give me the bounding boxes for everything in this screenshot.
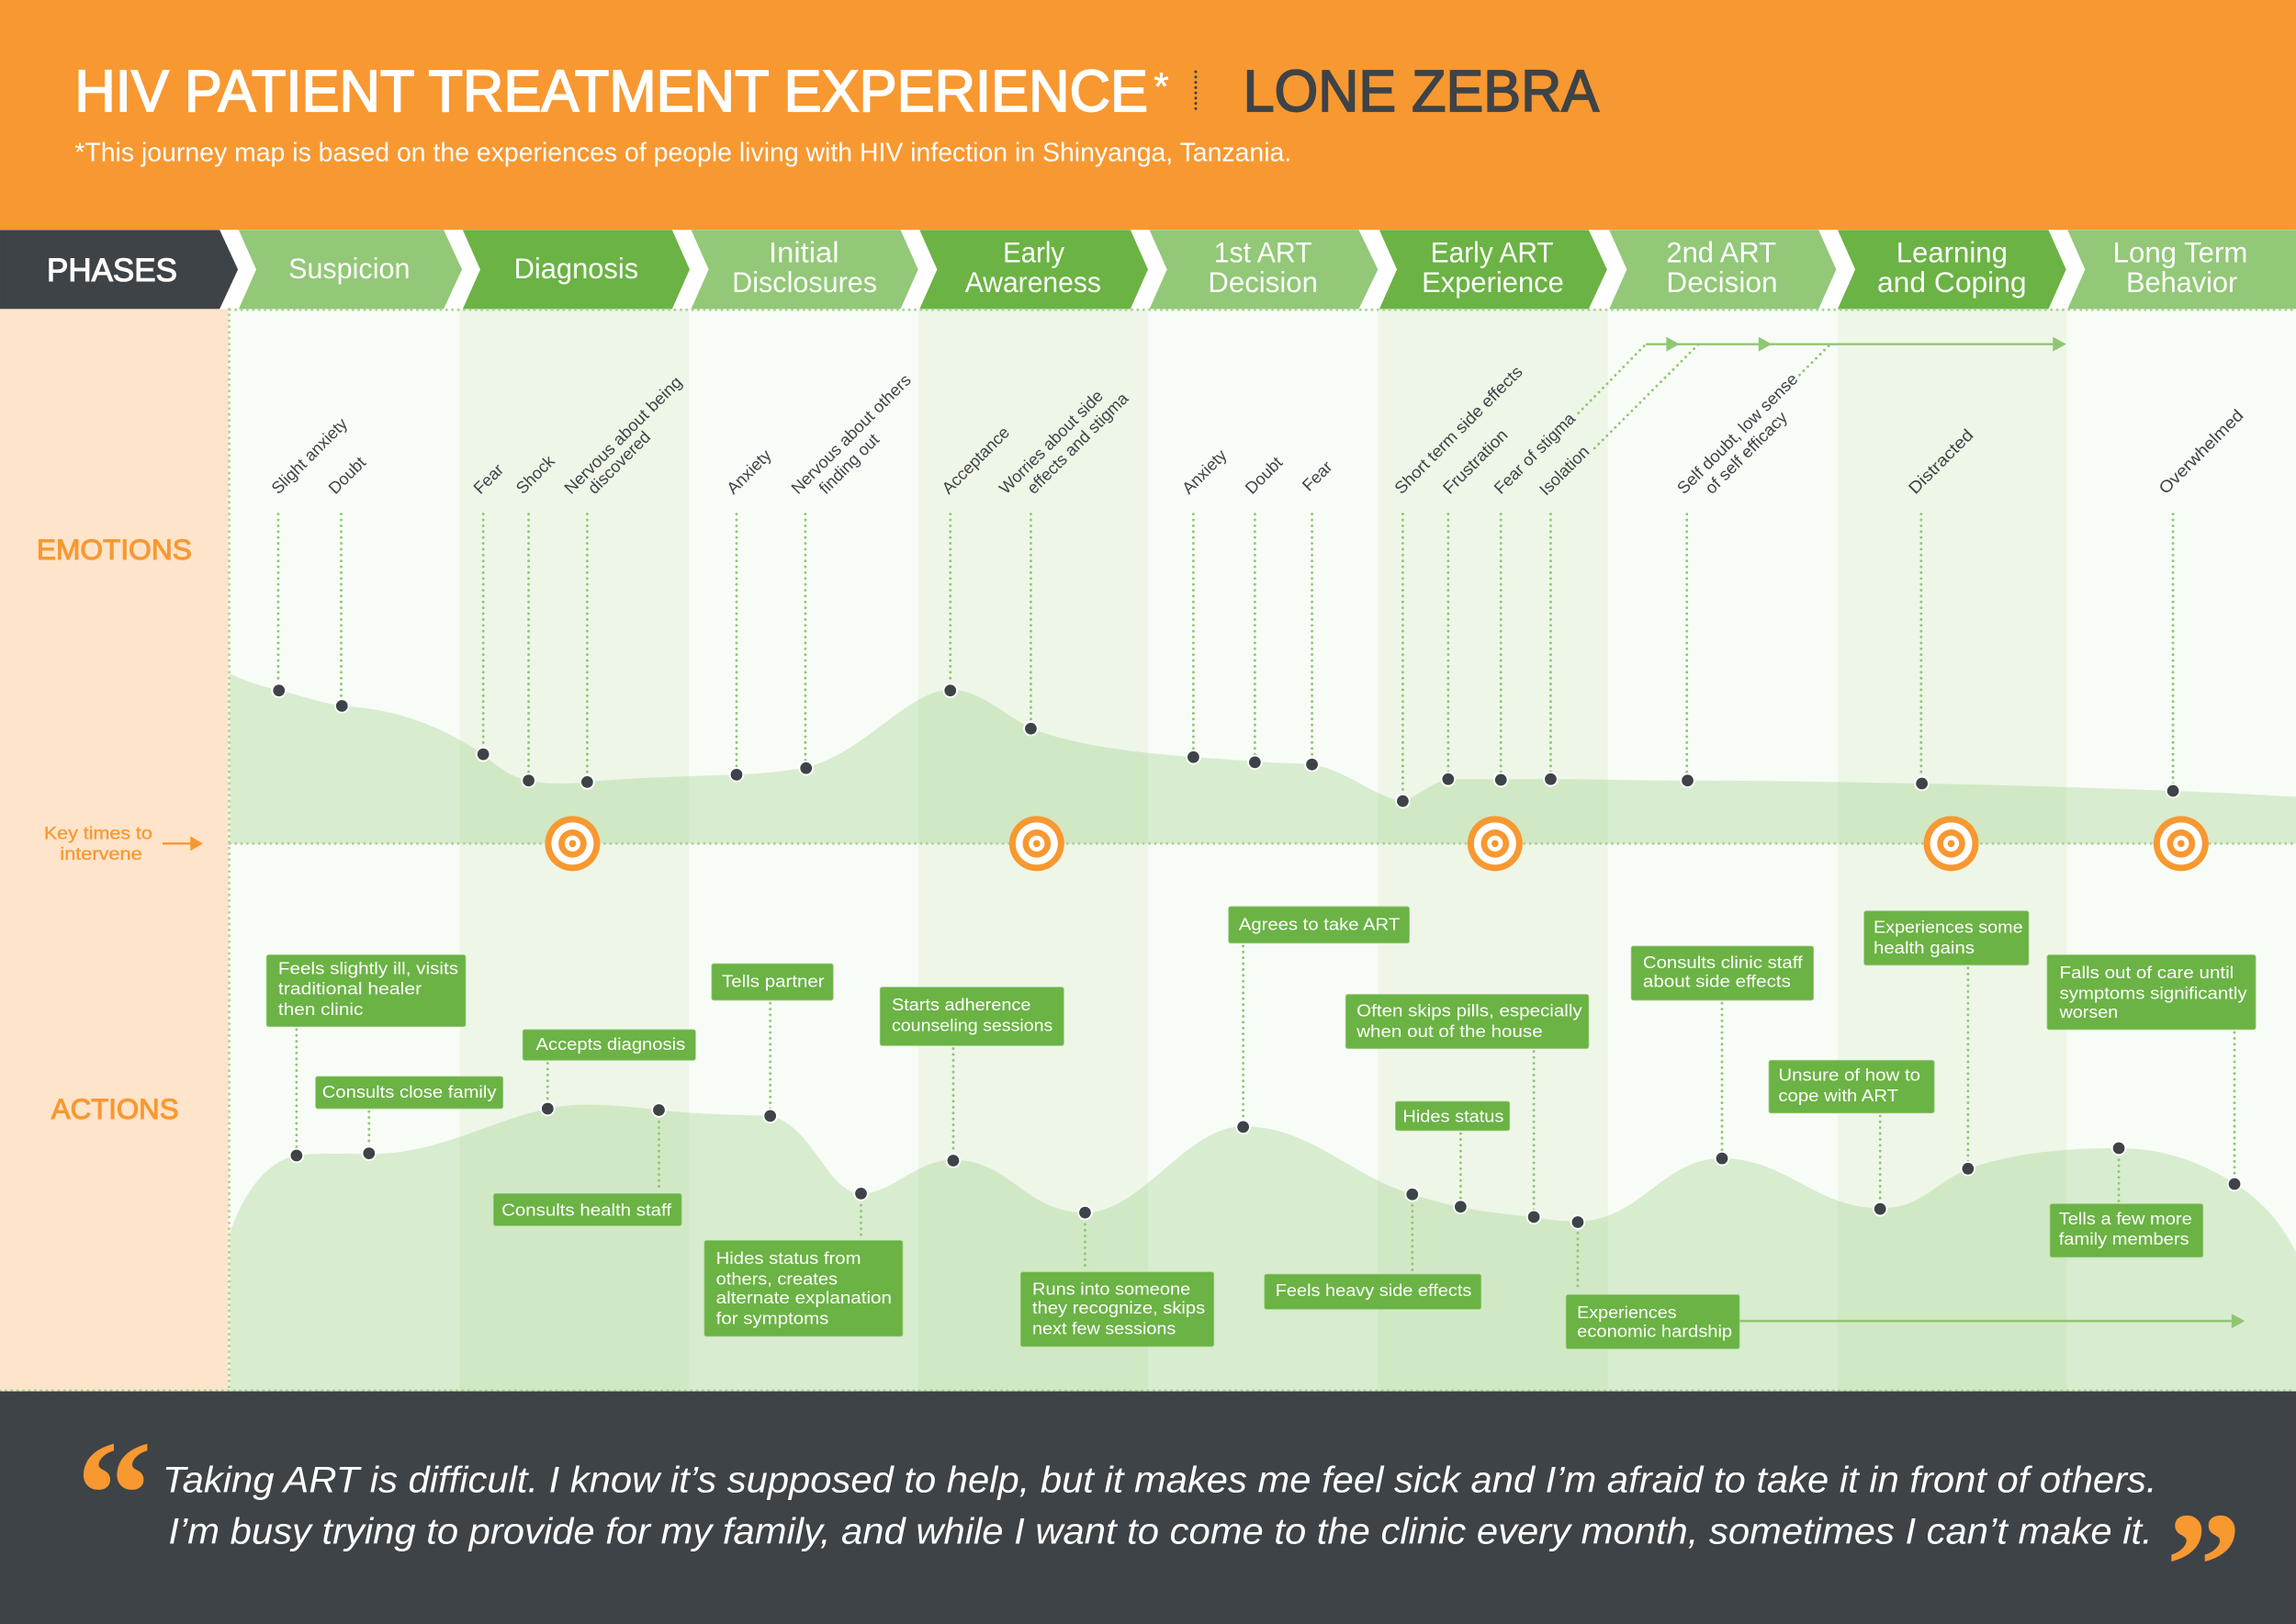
arrow: key times <box>163 836 203 851</box>
action: Feels heavy side effects <box>1265 1274 1481 1309</box>
phases label: PHASES <box>47 253 177 288</box>
phase: 2nd ART Decision <box>1609 230 1836 309</box>
action connectors <box>297 946 2234 1291</box>
action: Hides status from others: for symptoms <box>716 1309 828 1327</box>
phase: Initial Disclosures: Initial <box>769 235 839 268</box>
phase: 1st ART Decision: Decision <box>1208 265 1318 299</box>
action: Hides status: Hides status <box>1402 1107 1503 1125</box>
action: Experiences some health gains: Experiences some <box>1874 919 2023 937</box>
emotion labels: Fear <box>470 460 507 498</box>
left label column <box>0 309 229 1392</box>
action: Unsure of how to cope <box>1769 1060 1934 1113</box>
action: Runs into someone: Runs into someone <box>1032 1280 1190 1298</box>
phases label <box>0 230 238 309</box>
phase: 2nd ART Decision: 2nd ART <box>1666 235 1776 268</box>
phase: Suspicion <box>239 230 462 309</box>
action: Falls out of care: worsen <box>2058 1003 2118 1021</box>
action: Runs into someone: next few sessions <box>1032 1319 1176 1337</box>
key times label <box>44 825 152 864</box>
action: Tells a few more family members <box>2050 1204 2203 1257</box>
emotion persistence arrows <box>1579 337 2066 448</box>
action: Hides status from others: others, creates <box>716 1269 838 1288</box>
phase: Long Term Behavior: Long Term <box>2113 235 2247 268</box>
action: Consults clinic staff: Consults clinic staff <box>1643 953 1804 972</box>
emotion labels: Frustration <box>1439 425 1512 498</box>
action: Experiences some health gains: health gains <box>1874 939 1975 957</box>
brand name: LONE ZEBRA <box>1244 58 1600 124</box>
emotions curve <box>230 673 2296 843</box>
phase: Diagnosis: Diagnosis <box>514 252 638 285</box>
header banner <box>0 0 2296 230</box>
phase: Early ART Experience: Early ART <box>1431 235 1554 268</box>
action: Accepts diagnosis: Accepts diagnosis <box>536 1035 685 1054</box>
key times label: Key times to <box>44 825 152 844</box>
action: Feels heavy side effects: Feels heavy side effects <box>1276 1281 1471 1300</box>
action: Unsure of how to cope: Unsure of how to <box>1778 1066 1920 1085</box>
emotion labels: finding out <box>816 430 883 498</box>
action: Hides status <box>1395 1101 1510 1131</box>
emotion labels: Slight anxiety <box>268 414 352 498</box>
phase: Initial Disclosures <box>692 230 918 309</box>
emotion labels: Short term side effects <box>1391 363 1526 498</box>
action: Accepts diagnosis <box>523 1030 695 1060</box>
emotion labels: Distracted <box>1905 425 1977 498</box>
emotion labels: Doubt <box>1242 453 1286 498</box>
action: Feels slightly ill <box>266 955 466 1027</box>
action: Experiences some health gains <box>1864 911 2029 965</box>
action: Consults health staff <box>493 1193 681 1225</box>
phase: 1st ART Decision <box>1150 230 1378 309</box>
footer quote panel <box>0 1392 2296 1624</box>
action: Starts adherence counseling: Starts adherence <box>892 996 1030 1014</box>
action dots <box>290 1102 2241 1229</box>
action: Runs into someone <box>1020 1272 1214 1347</box>
subtitle: *This journey map is based on the experiences of people living with HIV infection in Shinyanga, Tanzania. <box>74 138 1291 167</box>
emotion labels: Doubt <box>325 453 369 498</box>
action: Consults health staff: Consults health staff <box>501 1201 672 1219</box>
action: Falls out of care: symptoms significantly <box>2059 984 2247 1002</box>
emotion labels: Nervous about being <box>561 373 685 498</box>
emotion dots <box>272 683 2179 807</box>
action: Often skips pills: Often skips pills, especially <box>1356 1001 1582 1020</box>
target icon: Learning and Coping <box>1924 816 1978 871</box>
action: Hides status from others <box>704 1240 903 1336</box>
phase: Early Awareness: Awareness <box>965 265 1101 299</box>
action: Tells a few more family members: family members <box>2059 1230 2189 1248</box>
arrow: economic hardship continues <box>1739 1314 2245 1328</box>
phase: 1st ART Decision: 1st ART <box>1214 235 1312 268</box>
action: Tells partner <box>712 964 833 1000</box>
phase: Long Term Behavior: Behavior <box>2126 265 2238 299</box>
emotion labels: discovered <box>584 427 654 498</box>
phase: Learning and Coping <box>1838 230 2066 309</box>
action: Often skips pills: when out of the house <box>1356 1022 1543 1041</box>
action: Consults close family: Consults close family <box>322 1083 497 1101</box>
emotion labels: Fear <box>1299 457 1336 495</box>
actions curve <box>230 1105 2296 1392</box>
quote text: I’m busy trying to provide for my family, and while I want to come to the clinic every month, sometimes I can’t make it. <box>168 1511 2153 1551</box>
emotions label: EMOTIONS <box>37 533 192 566</box>
emotion labels: Acceptance <box>939 423 1013 498</box>
target icon: Early Awareness <box>1009 816 1064 871</box>
emotion labels: of self efficacy <box>1702 407 1792 498</box>
emotion labels: Isolation <box>1536 442 1593 499</box>
action: Starts adherence counseling: counseling sessions <box>892 1016 1052 1034</box>
phases row <box>0 230 2296 309</box>
target icon: Long Term Behavior <box>2154 816 2209 871</box>
action: Feels slightly ill: then clinic <box>278 1000 363 1019</box>
action: Consults clinic staff: about side effects <box>1643 973 1791 991</box>
phase: Early Awareness <box>919 230 1148 309</box>
phase: Long Term Behavior <box>2067 230 2296 309</box>
action: Falls out of care <box>2047 955 2256 1030</box>
phase: Diagnosis <box>463 230 690 309</box>
action: Runs into someone: they recognize, skips <box>1032 1299 1205 1317</box>
action: Feels slightly ill: traditional healer <box>278 980 422 998</box>
title: HIV PATIENT TREATMENT EXPERIENCE <box>74 58 1148 124</box>
key times label: intervene <box>60 845 142 864</box>
action: Starts adherence counseling <box>880 987 1064 1045</box>
emotion labels: Overwhelmed <box>2155 406 2247 498</box>
phase: Learning and Coping: and Coping <box>1877 265 2027 299</box>
emotion labels: Shock <box>512 451 558 498</box>
quote text: Taking ART is difficult. I know it’s supposed to help, but it makes me feel sick and I’m afraid to take it in front of others. <box>163 1460 2157 1501</box>
phase: 2nd ART Decision: Decision <box>1666 265 1778 299</box>
emotion labels: effects and stigma <box>1023 389 1132 498</box>
target icon: Diagnosis <box>545 816 600 871</box>
action: Experiences economic hardship: economic hardship <box>1577 1323 1732 1341</box>
target icon: Early ART Experience <box>1468 816 1523 871</box>
emotion labels: Fear of stigma <box>1491 409 1580 498</box>
action: Experiences economic hardship <box>1566 1294 1739 1348</box>
phase: Early Awareness: Early <box>1003 235 1064 268</box>
opening quotation mark: “ <box>76 1409 152 1578</box>
emotion connectors <box>278 514 2173 795</box>
actions label: ACTIONS <box>51 1092 179 1125</box>
action: Unsure of how to cope: cope with ART <box>1778 1087 1898 1105</box>
emotion labels: Anxiety <box>723 445 775 498</box>
emotion labels: Nervous about others <box>788 371 915 498</box>
action: Experiences economic hardship: Experiences <box>1577 1303 1677 1322</box>
emotion labels: Self doubt, low sense <box>1673 369 1802 498</box>
action: Hides status from others: alternate explanation <box>716 1289 892 1307</box>
action: Falls out of care: Falls out of care until <box>2059 964 2234 982</box>
phase: Suspicion: Suspicion <box>288 252 410 285</box>
action: Agrees to take ART <box>1229 907 1410 943</box>
quote text <box>163 1460 2157 1551</box>
action: Tells partner: Tells partner <box>722 973 825 991</box>
emotion labels: Anxiety <box>1178 445 1231 498</box>
action: Tells a few more family members: Tells a few more <box>2059 1210 2192 1228</box>
phase: Early ART Experience: Experience <box>1422 265 1564 299</box>
phase: Learning and Coping: Learning <box>1896 235 2008 268</box>
action: Agrees to take ART: Agrees to take ART <box>1239 915 1400 933</box>
action: Often skips pills <box>1345 995 1589 1049</box>
phase: Early ART Experience <box>1379 230 1607 309</box>
action: Hides status from others: Hides status from <box>716 1249 861 1268</box>
title asterisk: * <box>1154 64 1169 107</box>
emotion labels <box>268 363 2247 499</box>
action: Consults clinic staff <box>1631 946 1814 1000</box>
action: Feels slightly ill: Feels slightly ill, visits <box>278 959 458 977</box>
emotion labels: Worries about side <box>996 387 1107 498</box>
divider <box>1195 72 1197 111</box>
action: Consults close family <box>316 1077 503 1109</box>
phase: Initial Disclosures: Disclosures <box>732 265 877 299</box>
